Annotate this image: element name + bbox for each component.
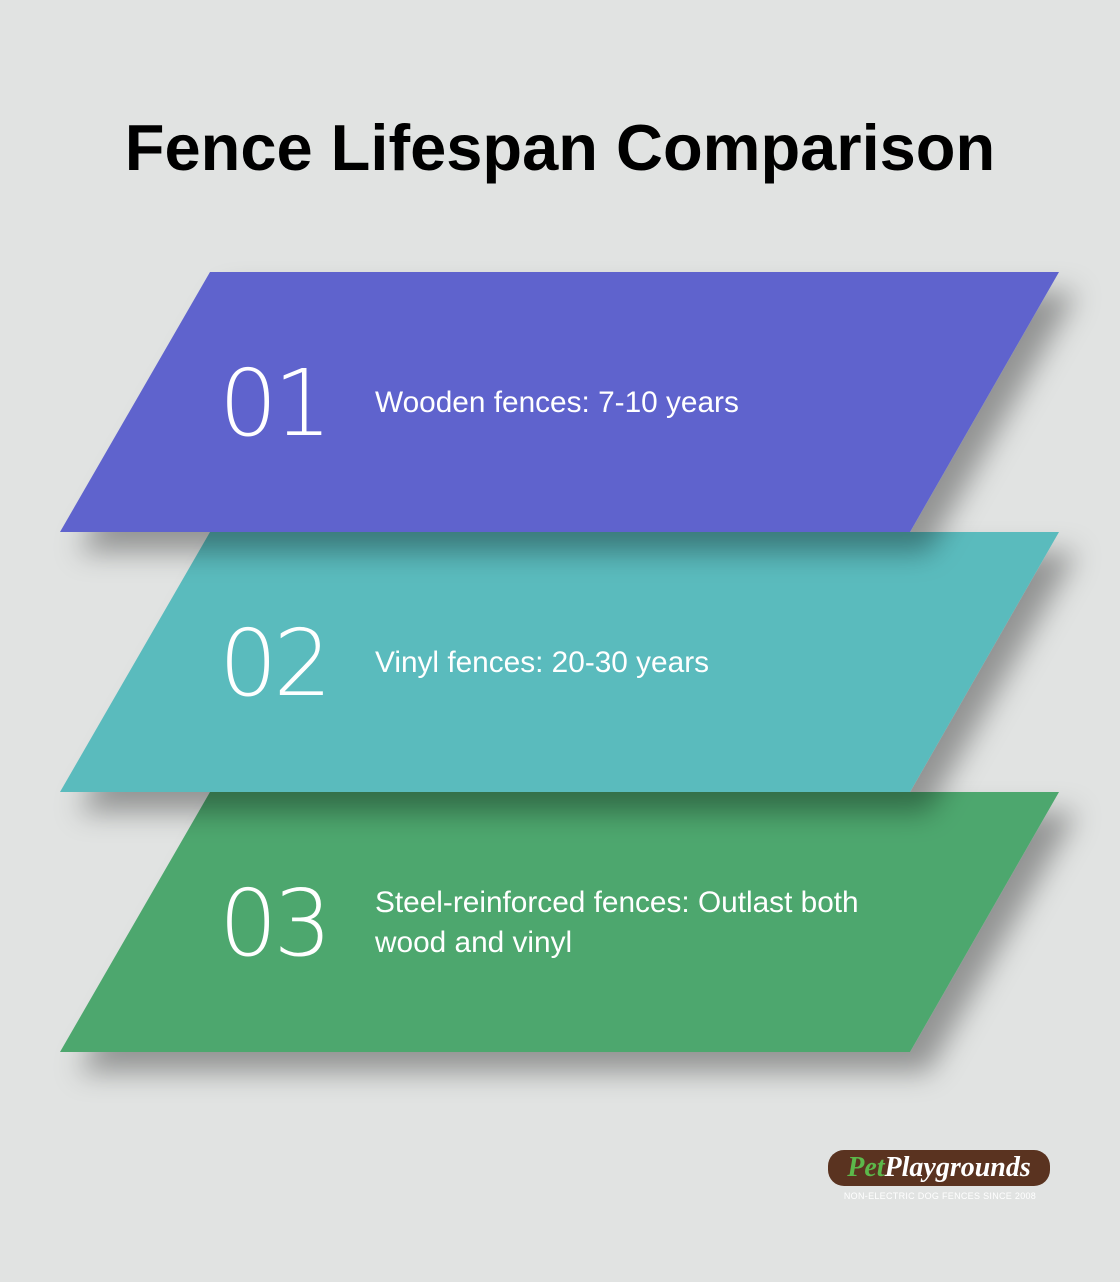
panel 3 [60,792,1059,1052]
panel 1 [60,272,1059,532]
text 3: Steel-reinforced fences: Outlast both wood and vinyl [375,886,859,959]
logo [828,1150,1050,1201]
text 1: Wooden fences: 7-10 years [375,386,739,419]
number 03: 03 [219,870,328,977]
title: Fence Lifespan Comparison [125,111,995,184]
number 02: 02 [219,610,328,717]
text 2: Vinyl fences: 20-30 years [375,646,709,679]
logo: NON-ELECTRIC DOG FENCES SINCE 2008 [844,1191,1036,1201]
panel 2 [60,532,1059,792]
number 01: 01 [219,350,328,457]
logo: PetPlaygrounds [847,1152,1031,1183]
